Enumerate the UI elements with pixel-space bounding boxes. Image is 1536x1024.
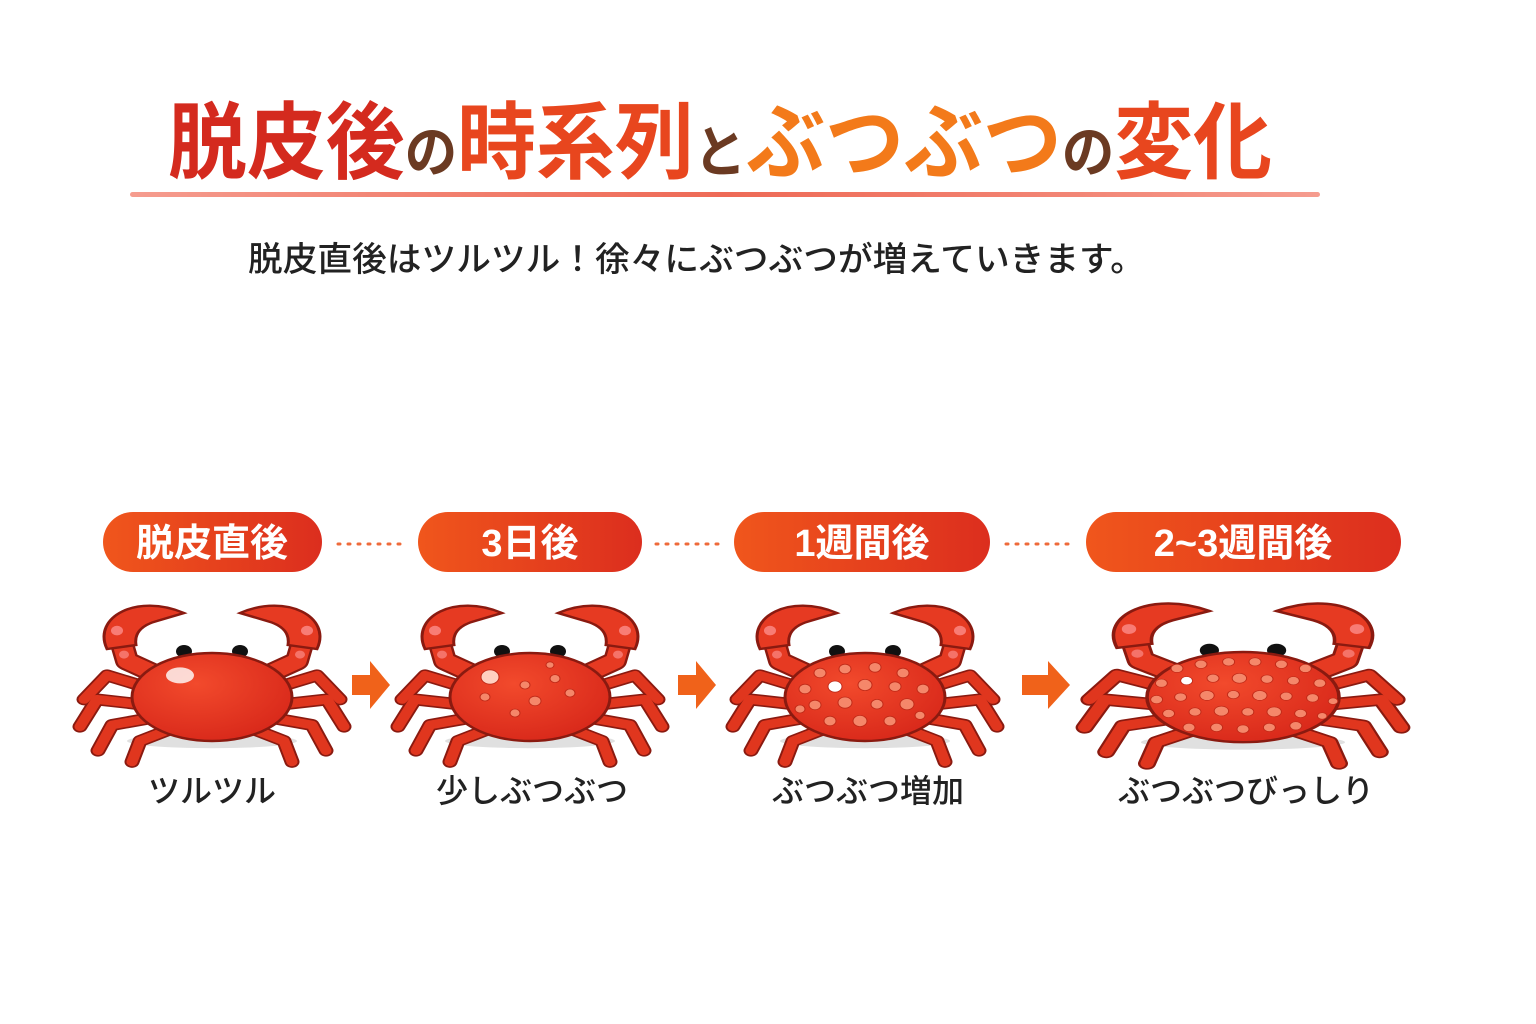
pill: 2~3週間後 xyxy=(1086,512,1401,572)
crab: few bumps xyxy=(398,606,662,762)
pill: 3日後 xyxy=(418,512,642,572)
pill: 1週間後 xyxy=(734,512,990,572)
title: 脱皮後の時系列とぶつぶつの変化 xyxy=(168,96,1272,190)
label: ぶつぶつびっしり: ぶつぶつびっしり xyxy=(1118,773,1374,809)
label: 少しぶつぶつ: 少しぶつぶつ xyxy=(436,773,628,809)
label: ぶつぶつ増加: ぶつぶつ増加 xyxy=(772,773,964,809)
arrow 3 xyxy=(1022,661,1070,709)
label: ツルツル: ツルツル xyxy=(148,773,276,809)
subtitle: 脱皮直後はツルツル！徐々にぶつぶつが増えていきます。 xyxy=(248,241,1145,279)
arrow 2 xyxy=(678,661,716,709)
crab: smooth xyxy=(80,606,344,762)
pill: 脱皮直後 xyxy=(103,512,322,572)
pill: 2~3週間後: 2~3週間後 xyxy=(1154,523,1332,565)
pill: 1週間後: 1週間後 xyxy=(794,523,930,565)
pill: 脱皮直後: 脱皮直後 xyxy=(136,523,288,565)
arrow 1 xyxy=(352,661,390,709)
crab: more bumps xyxy=(733,606,997,762)
pill: 3日後: 3日後 xyxy=(481,523,579,565)
crab: covered in bumps xyxy=(1085,604,1401,764)
